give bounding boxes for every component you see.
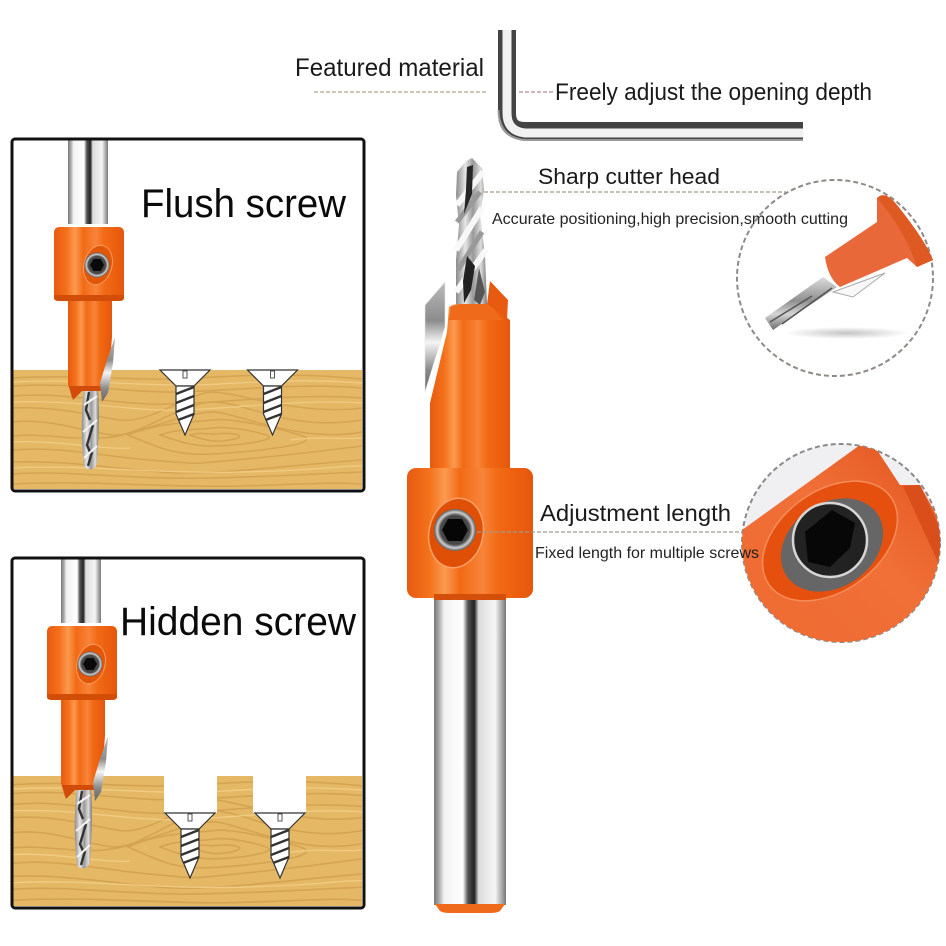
hex bolt recess — [422, 493, 490, 573]
recess notches — [164, 775, 306, 813]
orange body — [740, 445, 946, 650]
callout: sharp cutter head — [484, 164, 848, 228]
neck — [430, 304, 510, 468]
panel border — [12, 558, 364, 908]
bolt ring — [793, 503, 867, 577]
screw diagram left — [160, 370, 210, 435]
countersink drill bit — [47, 560, 117, 868]
blade — [833, 273, 885, 297]
heading: Flush screw — [141, 182, 346, 226]
recess — [762, 480, 898, 602]
detail circle: cutter head — [737, 180, 933, 376]
panel: hidden screw — [12, 519, 364, 908]
screw diagram right — [255, 813, 305, 878]
shank end cap — [435, 904, 505, 913]
shadow — [785, 327, 909, 339]
screw diagram left — [165, 813, 215, 878]
panel: flush screw — [12, 120, 364, 491]
collar — [407, 468, 533, 598]
flutes — [765, 277, 837, 330]
wood block — [13, 370, 362, 491]
label: freely adjust the opening depth: Freely adjust the opening depth — [555, 79, 872, 106]
countersink drill bit — [54, 120, 124, 469]
caption: fixed length for multiple screws: Fixed length for multiple screws — [535, 545, 759, 562]
hex key wrench — [498, 30, 803, 140]
callout: sharp cutter head: Accurate positioning,high precision,smooth cutting — [492, 211, 848, 228]
cutting blade — [425, 282, 445, 392]
screw diagram right — [248, 370, 298, 435]
panel border — [12, 139, 364, 491]
orange head — [825, 195, 933, 287]
heading: Hidden screw — [120, 600, 356, 644]
callout: adjustment length: Adjustment length — [540, 500, 731, 526]
bolt outer — [780, 498, 884, 592]
main countersink drill bit — [407, 158, 533, 913]
callout: sharp cutter head: Sharp cutter head — [538, 164, 720, 189]
hex socket — [805, 510, 855, 567]
detail circle: adjustment screw — [740, 444, 946, 650]
twist drill — [456, 158, 487, 305]
hex bolt — [434, 509, 476, 551]
label: featured material: Featured material — [295, 54, 484, 82]
shank — [434, 598, 506, 905]
right wedge — [487, 281, 508, 320]
wood block — [13, 776, 362, 908]
